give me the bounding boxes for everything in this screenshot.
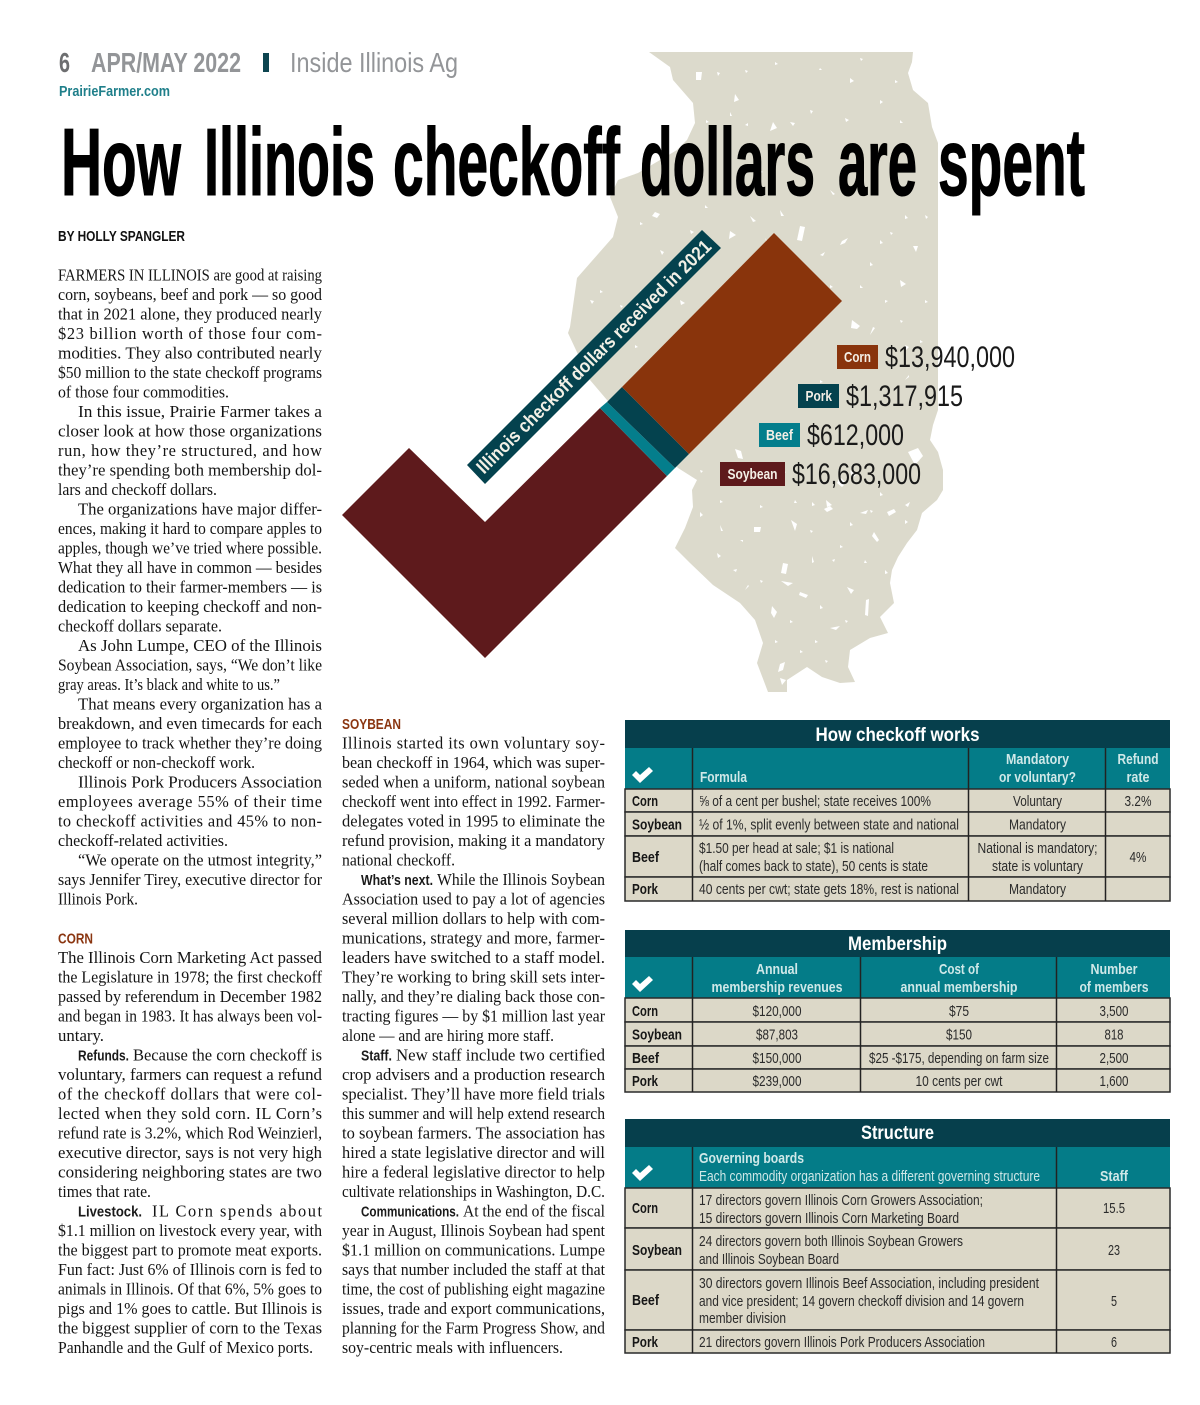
paragraph: this issue: run, how they’re structured, and how (58, 441, 322, 460)
table title: Membership (848, 933, 947, 955)
paragraph: this issue: they’re spending both membership dol- (58, 460, 322, 480)
paragraph: what's next: What’s next. (361, 873, 433, 889)
paragraph: refunds: voluntary, farmers can request a refund (58, 1065, 322, 1084)
paragraph: livestock: Panhandle and the Gulf of Mexico ports. (58, 1338, 313, 1357)
paragraph: soybean checkoff history: checkoff went into effect in 1992. Farmer- (342, 792, 605, 811)
paragraph: communications: says that number included the staff at that (342, 1260, 605, 1279)
paragraph: staff (342, 1046, 605, 1201)
paragraph: staff: specialist. They’ll have more field trials (342, 1084, 605, 1104)
paragraph: major differences: checkoff dollars separate. (58, 616, 222, 636)
paragraph: refunds: executive director, says is not very high (58, 1143, 322, 1162)
paragraph: corn marketing act: untary. (58, 1026, 104, 1045)
paragraph: major differences: dedication to keeping checkoff and non- (58, 597, 322, 616)
paragraph: livestock: pigs and 1% goes to cattle. But Illinois is (58, 1299, 322, 1318)
paragraph: john lumpe quote: gray areas. It’s black and white to us.” (58, 675, 280, 694)
table header row: Mandatory (1006, 751, 1070, 768)
legend: corn (837, 341, 1015, 374)
row: soybean: Soybean (632, 1026, 682, 1044)
row: corn: ⅝ of a cent per bushel; state receives 100% (699, 793, 931, 810)
chart label band: Illinois checkoff dollars received in 2021 (473, 236, 716, 478)
row: beef: (half comes back to state), 50 cents is state (699, 858, 928, 875)
paragraph: jennifer tirey quote (58, 850, 323, 908)
row: soybean: and Illinois Soybean Board (699, 1251, 839, 1268)
table title (625, 720, 1170, 748)
table header row: annual membership (900, 979, 1018, 996)
paragraph: corn marketing act (58, 948, 323, 1045)
row: pork: Pork (632, 1073, 659, 1090)
row: pork: Pork (632, 881, 659, 898)
paragraph: communications: year in August, Illinois Soybean had spent (342, 1221, 605, 1240)
paragraph: major differences: dedication to their farmer-members — is (58, 578, 322, 596)
paragraph: john lumpe quote: As John Lumpe, CEO of the Illinois (78, 636, 322, 655)
paragraph: staff: Staff. (361, 1048, 392, 1064)
paragraph: livestock: the biggest part to promote meat exports. (58, 1240, 322, 1260)
row: beef: 5 (1111, 1293, 1117, 1310)
row: pork (625, 877, 1170, 901)
row: corn (625, 1188, 1170, 1228)
paragraph: livestock: the biggest supplier of corn to the Texas (58, 1318, 322, 1338)
legend: beef: Beef (766, 427, 794, 444)
row: pork: 1,600 (1100, 1073, 1128, 1090)
table header row: or voluntary? (999, 769, 1076, 786)
paragraph: pork producers (58, 772, 322, 850)
row: soybean (625, 1022, 1170, 1046)
table header row (625, 1147, 1170, 1188)
paragraph: what's next: tracting figures — by $1 million last year (342, 1006, 606, 1026)
paragraph: refunds: of the checkoff dollars that were col- (58, 1084, 322, 1104)
row: corn: 17 directors govern Illinois Corn Growers Association; (699, 1192, 983, 1209)
row: beef: Beef (632, 1292, 660, 1309)
paragraph: what's next: nally, and they’re dialing back those con- (342, 987, 605, 1006)
intro paragraph: $50 million to the state checkoff programs (58, 363, 322, 382)
pork segment (607, 387, 689, 468)
row: soybean (625, 1228, 1170, 1270)
paragraph: what's next: While the Illinois Soybean (437, 870, 605, 889)
row: soybean: $87,803 (756, 1026, 798, 1044)
table: how checkoff works (625, 720, 1170, 901)
paragraph: communications: At the end of the fiscal (463, 1202, 605, 1220)
paragraph: timecards: breakdown, and even timecards for each (58, 714, 322, 733)
table: structure (625, 1119, 1170, 1353)
row: pork (625, 1330, 1170, 1353)
row: soybean: 818 (1104, 1026, 1124, 1044)
paragraph: john lumpe quote: Soybean Association, says, “We don’t like (58, 656, 322, 674)
row: pork: 40 cents per cwt; state gets 18%, rest is national (699, 881, 959, 898)
paragraph: what's next: alone — and are hiring more staff. (342, 1026, 554, 1045)
paragraph: livestock: $1.1 million on livestock every year, with (58, 1221, 322, 1240)
row: corn (625, 789, 1170, 812)
legend: pork: $1,317,915 (846, 380, 963, 413)
legend: soybean (720, 458, 921, 491)
row: soybean: 24 directors govern both Illinois Soybean Growers (699, 1233, 963, 1250)
title: How (61, 109, 181, 216)
paragraph: staff: hired a state legislative director and will (342, 1143, 605, 1162)
row: pork: $239,000 (752, 1073, 802, 1090)
paragraph: soybean checkoff history: national checkoff. (342, 850, 455, 870)
page header (59, 47, 458, 100)
intro paragraph: that in 2021 alone, they produced nearly (58, 304, 323, 324)
paragraph: communications: $1.1 million on communications. Lumpe (342, 1240, 605, 1260)
checkmark chart: checkoff dollars by commodity (342, 230, 842, 658)
title: are (838, 109, 917, 216)
row: beef: 2,500 (1100, 1050, 1128, 1067)
paragraph: communications: time, the cost of publishing eight magazine (342, 1280, 605, 1298)
header divider (263, 53, 269, 72)
table header row: rate (1126, 769, 1150, 786)
row: pork: Mandatory (1009, 881, 1066, 898)
title: checkoff (393, 109, 621, 216)
row: corn: 3,500 (1100, 1003, 1128, 1020)
table header row: of members (1080, 979, 1148, 996)
row: corn: $120,000 (752, 1003, 802, 1020)
paragraph: corn marketing act: The Illinois Corn Marketing Act passed (58, 948, 322, 967)
row: corn: 3.2% (1124, 793, 1152, 810)
row: beef: Beef (632, 1050, 660, 1067)
paragraph: what's next: Association used to pay a lot of agencies (342, 890, 605, 908)
paragraph: timecards: employee to track whether they’re doing (58, 734, 322, 752)
intro paragraph: of those four commodities. (58, 382, 229, 402)
paragraph: pork producers: checkoff-related activities. (58, 831, 228, 850)
title: Illinois (204, 109, 375, 216)
paragraph: major differences: What they all have in common — besides (58, 558, 322, 577)
row: pork (625, 1069, 1170, 1092)
paragraph: soybean checkoff history: delegates voted in 1995 to eliminate the (342, 812, 605, 830)
legend: pork (798, 380, 963, 413)
paragraph: major differences: The organizations have major differ- (78, 500, 322, 518)
row: beef: National is mandatory; (978, 840, 1098, 857)
row: beef: state is voluntary (992, 858, 1083, 875)
paragraph: soybean checkoff history: refund provision, making it a mandatory (342, 831, 606, 850)
table header row: Staff (1100, 1168, 1129, 1185)
row: beef: $150,000 (752, 1050, 802, 1067)
row: beef: 4% (1130, 849, 1146, 866)
paragraph: this issue (58, 402, 323, 499)
illinois map (568, 52, 943, 692)
row: corn: 15 directors govern Illinois Corn Marketing Board (699, 1210, 959, 1227)
row: pork: 10 cents per cwt (916, 1073, 1003, 1090)
paragraph: pork producers: to checkoff activities and 45% to non- (58, 812, 322, 830)
table title: How checkoff works (816, 724, 980, 746)
paragraph: refunds (58, 1046, 322, 1201)
paragraph: pork producers: employees average 55% of their time (58, 792, 322, 811)
table header row: Governing boards (699, 1150, 804, 1167)
legend: beef: $612,000 (807, 419, 904, 452)
row: soybean: ½ of 1%, split evenly between state and national (699, 816, 959, 834)
paragraph: refunds: Because the corn checkoff is (133, 1046, 322, 1064)
row: beef (625, 1046, 1170, 1069)
paragraph: what's next: munications, strategy and more, farmer- (342, 928, 605, 948)
table header row: Cost of (939, 961, 980, 978)
row: corn: Corn (632, 793, 658, 810)
paragraph: jennifer tirey quote: “We operate on the utmost integrity,” (78, 850, 322, 870)
row: corn: 15.5 (1103, 1200, 1125, 1217)
paragraph: this issue: lars and checkoff dollars. (58, 480, 217, 499)
row: soybean: $150 (946, 1026, 972, 1044)
beef segment (600, 402, 675, 476)
paragraph: refunds: lected when they sold corn. IL Corn’s (58, 1104, 322, 1123)
table header row (625, 957, 1170, 998)
table header row: Formula (700, 769, 748, 786)
paragraph: refunds: refund rate is 3.2%, which Rod Weinzierl, (58, 1124, 322, 1142)
table header row: Refund (1118, 751, 1158, 768)
paragraph: staff: cultivate relationships in Washington, D.C. (342, 1182, 605, 1201)
paragraph: staff: hire a federal legislative director to help (342, 1162, 605, 1182)
intro paragraph (58, 266, 323, 402)
paragraph: staff: New staff include two certified (396, 1046, 605, 1064)
paragraph: livestock (58, 1202, 322, 1357)
row: beef: Beef (632, 849, 660, 866)
title: dollars (640, 109, 815, 216)
paragraph: communications: planning for the Farm Progress Show, and (342, 1318, 605, 1338)
table header row: Each commodity organization has a different governing structure (699, 1168, 1040, 1185)
paragraph: timecards: That means every organization has a (78, 694, 323, 714)
row: pork: 6 (1111, 1334, 1117, 1351)
row: corn (625, 998, 1170, 1022)
intro paragraph: $23 billion worth of those four com- (58, 324, 322, 343)
legend: soybean: $16,683,000 (792, 458, 921, 491)
paragraph: livestock: IL Corn spends about (152, 1202, 322, 1220)
paragraph: corn marketing act: the Legislature in 1978; the first checkoff (58, 968, 323, 986)
intro paragraph: FARMERS IN ILLINOIS are good at raising (58, 266, 322, 284)
paragraph: corn marketing act: passed by referendum in December 1982 (58, 987, 322, 1006)
paragraph: corn marketing act: and began in 1983. It has always been vol- (58, 1006, 322, 1026)
intro paragraph: corn, soybeans, beef and pork — so good (58, 285, 322, 304)
paragraph: this issue: In this issue, Prairie Farmer takes a (78, 402, 323, 421)
paragraph: communications: soy-centric meals with influencers. (342, 1338, 563, 1357)
paragraph: major differences: apples, though we’ve tried where possible. (58, 538, 322, 558)
paragraph: soybean checkoff history: seded when a uniform, national soybean (342, 772, 605, 792)
table title (625, 1119, 1170, 1147)
paragraph: what's next (342, 870, 606, 1045)
paragraph: livestock: animals in Illinois. Of that 6%, 5% goes to (58, 1280, 322, 1298)
paragraph: timecards: checkoff or non-checkoff work. (58, 753, 255, 772)
legend: corn: $13,940,000 (885, 341, 1015, 374)
row: beef: $1.50 per head at sale; $1 is national (699, 840, 894, 857)
paragraph: communications: Communications. (361, 1204, 459, 1220)
row: beef: and vice president; 14 govern checkoff division and 14 govern (699, 1293, 1024, 1310)
table header row: Annual (756, 961, 798, 978)
table header row: membership revenues (712, 979, 842, 996)
paragraph: what's next: They’re working to bring skill sets inter- (342, 968, 605, 986)
row: corn: $75 (949, 1003, 969, 1020)
paragraph: major differences (58, 500, 322, 636)
issue date: APR/MAY 2022 (91, 47, 241, 78)
legend: beef (759, 419, 904, 452)
paragraph: refunds: times that rate. (58, 1182, 151, 1201)
paragraph: soybean checkoff history (342, 734, 606, 870)
heading: corn: CORN (58, 932, 93, 948)
row: soybean: Soybean (632, 816, 682, 834)
paragraph: pork producers: Illinois Pork Producers Association (78, 772, 322, 792)
paragraph: jennifer tirey quote: Illinois Pork. (58, 890, 138, 908)
row: corn: Voluntary (1013, 793, 1062, 810)
row: beef: $25 -$175, depending on farm size (869, 1050, 1049, 1067)
legend: soybean: Soybean (728, 466, 778, 483)
paragraph: refunds: Refunds. (78, 1048, 129, 1064)
row: beef (625, 836, 1170, 877)
section name: Inside Illinois Ag (290, 47, 458, 78)
article column 1 (58, 266, 323, 1357)
paragraph: staff: crop advisers and a production research (342, 1065, 605, 1084)
paragraph: communications (342, 1202, 605, 1357)
row: soybean (625, 812, 1170, 836)
table header row (625, 748, 1170, 789)
article column 2 (342, 717, 606, 1357)
paragraph: soybean checkoff history: bean checkoff in 1964, which was super- (342, 753, 605, 772)
row: beef: 30 directors govern Illinois Beef Association, including president (699, 1275, 1040, 1292)
row: soybean: Soybean (632, 1242, 682, 1259)
legend: corn: Corn (844, 349, 871, 366)
paragraph: jennifer tirey quote: says Jennifer Tirey, executive director for (58, 870, 323, 889)
row: beef (625, 1270, 1170, 1330)
soybean segment (342, 408, 667, 658)
table title (625, 930, 1170, 957)
paragraph: this issue: closer look at how those organizations (58, 422, 322, 440)
byline: BY HOLLY SPANGLER (58, 229, 185, 245)
title: spent (938, 109, 1085, 216)
intro paragraph: modities. They also contributed nearly (58, 344, 323, 362)
table: membership (625, 930, 1170, 1092)
heading: soybean: SOYBEAN (342, 717, 401, 733)
paragraph: livestock: Livestock. (78, 1204, 142, 1220)
row: corn: Corn (632, 1003, 658, 1020)
paragraph: what's next: several million dollars to help with com- (342, 909, 605, 928)
page number: 6 (59, 47, 70, 78)
title (61, 109, 1085, 216)
website: PrairieFarmer.com (59, 83, 170, 100)
paragraph: staff: this summer and will help extend research (342, 1104, 605, 1123)
row: pork: Pork (632, 1334, 659, 1351)
row: beef: member division (699, 1310, 786, 1327)
paragraph: timecards (58, 694, 323, 772)
paragraph: what's next: leaders have switched to a staff model. (342, 948, 605, 967)
paragraph: refunds: considering neighboring states are two (58, 1162, 322, 1182)
row: soybean: Mandatory (1009, 816, 1066, 834)
legend: pork: Pork (806, 388, 833, 405)
row: corn: Corn (632, 1200, 658, 1217)
corn segment (622, 233, 842, 454)
paragraph: john lumpe quote (58, 636, 322, 694)
table header row: Number (1090, 961, 1138, 978)
table title: Structure (861, 1122, 934, 1144)
paragraph: soybean checkoff history: Illinois started its own voluntary soy- (342, 734, 605, 752)
legend with amounts (720, 341, 1015, 491)
paragraph: staff: to soybean farmers. The association has (342, 1124, 605, 1142)
row: soybean: 23 (1108, 1242, 1120, 1259)
row: pork: 21 directors govern Illinois Pork Producers Association (699, 1334, 985, 1351)
paragraph: livestock: Fun fact: Just 6% of Illinois corn is fed to (58, 1260, 322, 1279)
paragraph: major differences: ences, making it hard to compare apples to (58, 519, 322, 538)
paragraph: communications: issues, trade and export communications, (342, 1299, 605, 1318)
